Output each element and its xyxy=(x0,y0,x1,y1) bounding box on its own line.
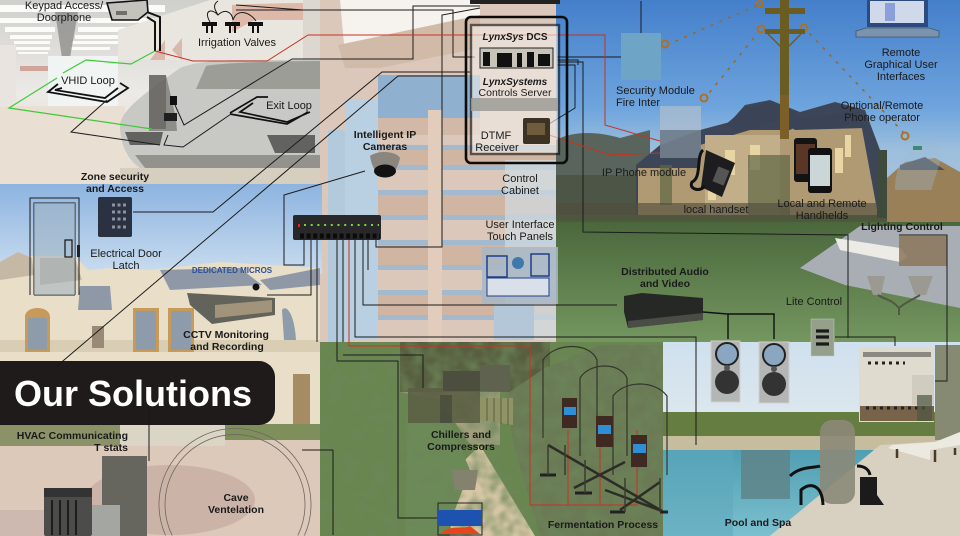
label: Distributed Audio: Distributed Audio xyxy=(621,266,709,278)
label: Handhelds: Handhelds xyxy=(796,210,849,222)
icon: exit loop xyxy=(230,97,310,124)
icon: CCTV monitor xyxy=(187,284,275,324)
panel: cobblestone driveway xyxy=(0,424,322,536)
label: Keypad Access: Keypad Access/ xyxy=(25,0,104,12)
icon: laptop remote interface xyxy=(856,0,939,37)
label: Fire Inter: Fire Inter xyxy=(616,97,660,109)
panel: silver sports car xyxy=(120,60,320,184)
label: CCTV Monitoring: CCTV Monitoring xyxy=(183,329,269,341)
icon: utility pole xyxy=(765,0,805,139)
icon: user interface touch panels xyxy=(482,247,558,304)
label: DTMF: DTMF xyxy=(481,130,512,142)
label: and Video: and Video xyxy=(640,278,690,290)
banner title: Our Solutions xyxy=(14,373,252,414)
label: Controls Server: Controls Server xyxy=(479,87,552,99)
icon: HVAC units xyxy=(44,456,147,536)
diagram wiring: red signal lines xyxy=(155,35,660,505)
label: Control: Control xyxy=(502,173,538,185)
label: Lighting Control: Lighting Control xyxy=(861,221,943,233)
diagram wiring: dotted wireless links xyxy=(662,1,908,140)
icon: lite control switch xyxy=(811,319,834,356)
left speaker xyxy=(711,341,740,402)
label: Intelligent IP: Intelligent IP xyxy=(354,129,416,141)
label: Cameras: Cameras xyxy=(363,141,407,153)
panel: pool background xyxy=(663,342,960,536)
right speaker xyxy=(759,342,789,403)
label: VHID Loop: VHID Loop xyxy=(61,75,115,87)
panel: lawn xyxy=(556,212,960,342)
icon: top rack edge xyxy=(470,0,560,4)
label: Electrical Door: Electrical Door xyxy=(90,248,162,260)
panel: left mansion facade xyxy=(0,184,322,430)
label: Cave: Cave xyxy=(223,492,249,504)
icon: chandelier xyxy=(867,276,933,315)
label: Security Module: Security Module xyxy=(616,85,695,97)
icon: dome IP camera xyxy=(370,152,400,178)
banner: Our Solutions xyxy=(0,361,275,425)
panel: tower building xyxy=(320,0,560,342)
icon: security module xyxy=(621,33,661,80)
label: and Recording: and Recording xyxy=(190,341,264,353)
label: and Access: and Access xyxy=(86,183,144,195)
icon: DTMF receiver module xyxy=(523,118,550,144)
label: LynxSystems: LynxSystems xyxy=(483,77,548,88)
icon: cave ventilation circle xyxy=(159,429,311,536)
icon: desk phone handset xyxy=(691,150,735,197)
icon: network switch xyxy=(293,215,381,240)
panel: evening sky xyxy=(556,0,960,215)
logo watermark: DEDICATED MICROS xyxy=(192,266,273,275)
panel: control cabinet xyxy=(466,17,567,163)
icon: electrical door latch xyxy=(34,203,80,295)
panel: vineyard background xyxy=(320,342,664,536)
label: Graphical User: Graphical User xyxy=(864,59,938,71)
label: Local and Remote: Local and Remote xyxy=(777,198,867,210)
icon: keypad reader xyxy=(98,197,132,237)
icon: speakers xyxy=(711,341,789,403)
label: Phone operator: Phone operator xyxy=(844,112,920,124)
panel: illuminated mansion xyxy=(556,100,960,222)
label: Touch Panels: Touch Panels xyxy=(487,231,554,243)
diagram wiring: green loop cables xyxy=(9,51,155,129)
label: local handset: local handset xyxy=(684,204,748,216)
icon: handheld phones xyxy=(794,138,832,193)
icon: VHID loop xyxy=(48,83,128,102)
label: Interfaces: Interfaces xyxy=(877,71,926,83)
label: Cabinet: Cabinet xyxy=(501,185,539,197)
icon: lighting controller unit xyxy=(859,347,934,422)
panel: parking garage background xyxy=(0,0,322,184)
icon: IP phone module xyxy=(660,106,701,158)
label: T stats: T stats xyxy=(94,442,128,454)
icon: pool heater xyxy=(741,450,790,499)
label: Zone security: Zone security xyxy=(81,171,149,183)
label: Receiver: Receiver xyxy=(475,142,519,154)
DCS rack xyxy=(480,48,553,68)
label: Optional/Remote: Optional/Remote xyxy=(841,100,923,112)
label: Fermentation Process: Fermentation Process xyxy=(548,519,658,531)
label: IP Phone module: IP Phone module xyxy=(602,167,686,179)
label: Exit Loop: Exit Loop xyxy=(266,100,312,112)
label: Irrigation Valves: Irrigation Valves xyxy=(198,37,277,49)
icon: gate controller box xyxy=(149,75,177,131)
icon: fermentation tanks xyxy=(540,346,668,512)
icon: irrigation valves xyxy=(202,1,303,33)
icon: chillers and compressors xyxy=(408,365,513,425)
label: Compressors: Compressors xyxy=(427,441,495,453)
label: User Interface: User Interface xyxy=(485,219,555,231)
panel: patio with lounge chairs xyxy=(800,226,960,308)
label: Ventelation: Ventelation xyxy=(208,504,264,516)
label: HVAC Communicating: HVAC Communicating xyxy=(17,430,128,442)
icon: pump and solar panel xyxy=(438,470,482,535)
icon: lounge chairs xyxy=(888,432,960,462)
icon: keypad doorphone box xyxy=(107,0,160,51)
label: Remote: Remote xyxy=(882,47,920,59)
gray server band xyxy=(471,98,558,111)
icon: audio video receiver xyxy=(624,293,703,328)
label: Pool and Spa: Pool and Spa xyxy=(725,517,791,529)
label: Latch: Latch xyxy=(113,260,139,272)
label: Lite Control: Lite Control xyxy=(786,296,842,308)
label: Doorphone: Doorphone xyxy=(37,12,91,24)
icon: bell jar house xyxy=(895,140,941,190)
label: Chillers and: Chillers and xyxy=(431,429,491,441)
icon: pool filter and pump xyxy=(790,420,884,505)
label: LynxSys DCS: LynxSys DCS xyxy=(482,32,548,43)
